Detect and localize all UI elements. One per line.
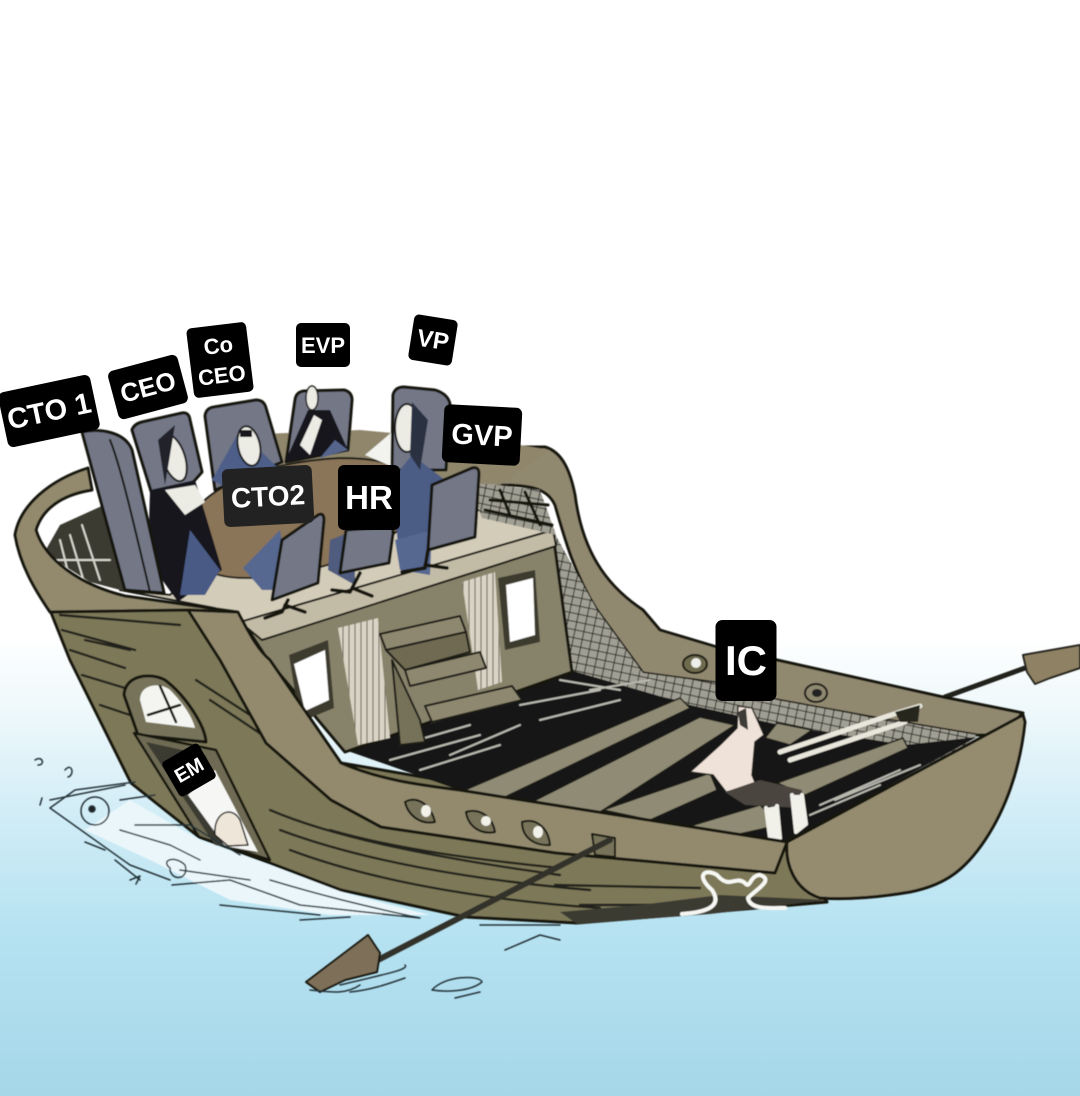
oar port xyxy=(592,834,615,857)
deck edge xyxy=(240,530,556,640)
back chairs xyxy=(132,387,450,520)
bow cap xyxy=(787,715,1025,899)
stern rail band xyxy=(15,468,238,640)
railing scribble right xyxy=(470,482,556,535)
label: EM: EM xyxy=(171,754,208,788)
label: VP: VP xyxy=(415,325,451,356)
label: CEO xyxy=(107,354,189,420)
IC rower figure xyxy=(690,706,806,838)
label: CTO2 xyxy=(222,465,314,527)
label: Co CEO xyxy=(186,322,254,398)
deck floor xyxy=(120,510,553,625)
IC oar handle xyxy=(780,705,920,760)
label: EM xyxy=(161,742,217,798)
benches xyxy=(458,698,908,835)
illustration: boat xyxy=(15,386,1080,998)
label: HR xyxy=(338,465,400,530)
figure: Co CEO xyxy=(212,424,280,500)
label: Co CEO: CEO xyxy=(197,360,247,391)
label: IC xyxy=(716,620,776,701)
meeting table xyxy=(184,458,421,578)
main side band xyxy=(188,610,787,873)
water streaks on floor xyxy=(380,680,920,815)
label: Co CEO: Co xyxy=(202,331,234,360)
stern railing scribble xyxy=(44,505,128,592)
front chairs xyxy=(272,468,479,600)
chair feet xyxy=(265,550,447,618)
label: EVP: EVP xyxy=(301,333,345,358)
label: EVP xyxy=(296,323,350,367)
foam patch under stern xyxy=(85,800,430,915)
label: CTO 1 xyxy=(0,374,101,448)
rail porthole 1 xyxy=(683,655,707,673)
right oar behind the boat xyxy=(945,645,1080,697)
paper on table xyxy=(365,432,420,470)
figure: EVP xyxy=(285,386,348,462)
seated figures near table xyxy=(243,530,432,590)
label: HR: HR xyxy=(345,479,393,516)
figure: CEO xyxy=(148,425,222,602)
flooded dark floor xyxy=(345,670,977,842)
label: CTO2: CTO2 xyxy=(230,479,306,514)
back rail xyxy=(262,430,550,485)
curtain right xyxy=(462,572,502,690)
cabin wall under deck xyxy=(245,530,572,752)
figure: VP xyxy=(392,402,445,560)
hull planks xyxy=(50,610,827,924)
label: CTO 1: CTO 1 xyxy=(4,388,94,436)
big CEO-side chair xyxy=(82,431,164,593)
label: CEO: CEO xyxy=(117,365,179,409)
label: GVP: GVP xyxy=(451,418,513,454)
brick wall xyxy=(550,525,977,770)
hull portholes xyxy=(405,800,550,845)
curtain left xyxy=(338,618,390,745)
main oar xyxy=(306,840,610,992)
arched window and door xyxy=(124,676,270,860)
white foam at leak xyxy=(682,872,785,914)
water scribbles around stern xyxy=(35,759,560,998)
cabin window right xyxy=(498,570,540,650)
far side rail band xyxy=(430,447,1023,735)
label: GVP xyxy=(442,404,522,466)
staircase xyxy=(380,616,522,745)
cabin window left xyxy=(289,640,334,722)
stern scribble bars xyxy=(52,525,110,585)
rail porthole 2 xyxy=(805,684,827,702)
label: VP xyxy=(408,314,458,366)
label: IC: IC xyxy=(725,637,767,684)
